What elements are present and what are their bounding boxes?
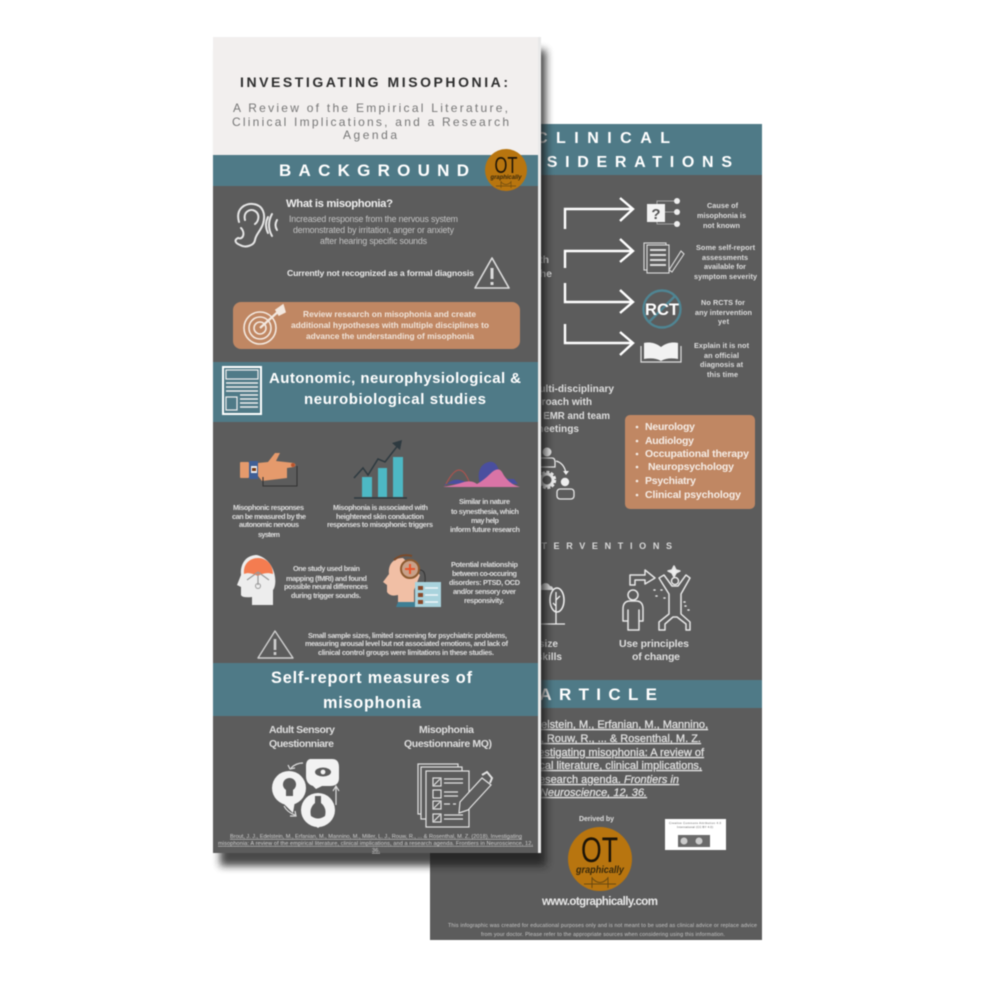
logo: OT graphically small: OT (494, 152, 518, 178)
text: assessments: symptom severity (694, 272, 758, 281)
heading: autonomic studies (213, 362, 538, 422)
subtitle: A Review of the Empirical Literature, (233, 101, 508, 115)
icon: warning triangle (475, 258, 509, 288)
logo: OT graphically small (485, 149, 527, 191)
text: assessments: assessments (702, 253, 748, 262)
panel: disciplines list: Neuropsychology (648, 461, 734, 473)
badge: creative commons license (665, 819, 726, 850)
panel: back card clinical considerations (430, 124, 762, 940)
front card shadow (220, 50, 546, 866)
heading: article: THE ARTICLE (472, 685, 657, 704)
icon: open book (641, 342, 681, 362)
icon: hand with wristband (240, 453, 297, 486)
text: no RCTs (695, 298, 752, 326)
arrow 1 (565, 198, 633, 229)
text: co-occurring disorders: and/or sensory over (453, 587, 516, 596)
chart: rising bars (354, 440, 407, 498)
text: cause: not known (703, 221, 740, 230)
text: emphasize skills: coping skills (501, 652, 562, 663)
panel: disciplines list: Audiology (645, 435, 694, 447)
callout: research aim: advance the understanding of misophonia (306, 331, 474, 341)
text: footer citation (218, 834, 533, 854)
logo: OT graphically large: OT (581, 831, 618, 870)
logo: OT graphically large: graphically (575, 865, 624, 876)
text: synesthesia: may help (471, 516, 500, 525)
text: article citation: (2018). Investigating misophonia: A review of (486, 747, 705, 759)
text: skin conduction: Misophonia is associated with (333, 503, 428, 512)
callout: research aim: additional hypotheses with multiple disciplines to (291, 320, 489, 330)
text: no RCTs: yet (718, 317, 730, 326)
text: co-occurring disorders (449, 560, 520, 605)
text: not official: Explain it is not (694, 341, 750, 350)
heading: article (430, 680, 762, 708)
text: multi-disciplinary approach: EMR and team (543, 411, 610, 422)
text: what is misophonia: What is misophonia? (286, 198, 393, 210)
text: co-occurring disorders: between co-occuring (452, 569, 517, 578)
icon: question box (647, 198, 680, 227)
text: fMRI (284, 564, 368, 600)
text: fMRI: possible neural differences (284, 582, 368, 591)
text: multi-disciplinary approach: meetings (535, 424, 579, 435)
callout: research aim: Review research on misophonia and create (303, 309, 476, 319)
text: what is misophonia: demonstrated by irritation, anger or anxiety (293, 225, 455, 235)
text: footer citation: Brout, J. J., Edelstein, M., Erfanian, M., Mannino, M., Miller, L. J., Rouw, R., ... & Rosenthal, M. Z. (2018). Investigating (230, 834, 522, 840)
text: article citation: Brout, J. J., Edelstein, M., Erfanian, M., Mannino, (469, 719, 708, 731)
partial text behind front card: the (536, 268, 552, 280)
text: not official: this time (707, 370, 738, 379)
text: multi-disciplinary approach: approach with (524, 397, 592, 408)
text: article citation: the empirical literature, clinical implications, (491, 760, 702, 772)
icon: checklist small (644, 243, 684, 273)
icon: no RCT (644, 290, 680, 328)
text: cause: misophonia is (697, 211, 746, 220)
text: limitations: measuring arousal level but not associated emotions, and lack of (305, 639, 509, 648)
text: synesthesia: inform future research (450, 525, 520, 534)
icon: question box: ? (651, 206, 661, 223)
heading: self-report measures (213, 663, 538, 716)
heading: autonomic studies: Autonomic, neurophysiological & (269, 370, 521, 387)
icon: document (223, 367, 261, 414)
subtitle: Clinical Implications, and a Research (232, 115, 509, 129)
text: not official (694, 341, 750, 379)
text: fMRI: during trigger sounds. (291, 591, 361, 600)
text: limitations: Small sample sizes, limited screening for psychiatric problems, (308, 631, 507, 640)
text: assessments (694, 243, 758, 281)
panel: disciplines list (625, 415, 755, 509)
text: no RCTs: No RCTS for (701, 298, 745, 307)
text: not official: an official (704, 351, 739, 360)
partial text behind front card (527, 254, 552, 280)
text: use principles: of change (632, 651, 680, 663)
text: cause: Cause of (707, 201, 739, 210)
icon: checklist and pencil (418, 764, 492, 827)
text: synesthesia: to synesthesia, which (451, 507, 519, 516)
title: INVESTIGATING MISOPHONIA: (240, 74, 508, 90)
text: autonomic response: system (258, 530, 280, 539)
text: footer citation: misophonia: A review of the empirical literature, clinical implications, and a research agenda. Frontiers in Neuroscience, 12, (218, 841, 533, 847)
text: misophonia questionnaire (404, 724, 492, 750)
icon: head with brain (237, 555, 275, 605)
icon: person change (623, 566, 690, 630)
heading: self-report measures: misophonia (323, 694, 422, 712)
icon: tree (536, 583, 565, 624)
subtitle: Agenda (343, 128, 397, 142)
text: synesthesia (450, 497, 520, 534)
text: autonomic response: Misophonic responses (233, 503, 304, 512)
text: cause (697, 201, 746, 230)
heading: interventions: INTERVENTIONS (519, 541, 672, 551)
logo: OT graphically large (568, 827, 632, 891)
panel: front card investigating misophonia (213, 37, 541, 854)
text: skin conduction: heightened skin conduction (336, 512, 424, 521)
text: synesthesia: Similar in nature (459, 497, 510, 506)
text: disclaimer (448, 923, 757, 938)
logo: OT graphically small: graphically (490, 174, 522, 181)
heading: clinical considerations: CONSIDERATIONS (488, 154, 732, 171)
panel: disciplines list: Neurology (645, 421, 695, 433)
heading: self-report measures: Self-report measures of (271, 669, 473, 687)
heading: autonomic studies: neurobiological studies (304, 391, 486, 408)
icon: ear (236, 204, 277, 246)
text: autonomic response: can be measured by the (232, 512, 306, 521)
text: what is misophonia: Increased response from the nervous system (289, 214, 458, 224)
icon: speech bubbles (272, 759, 339, 828)
subtitle (232, 101, 509, 142)
icon: team network (538, 448, 574, 499)
text: assessments: Some self-report (696, 243, 756, 252)
panel: disciplines list: Psychiatry (645, 475, 696, 487)
text: use principles (619, 638, 689, 663)
text: not a formal diagnosis: Currently not recognized as a formal diagnosis (287, 268, 474, 278)
text: autonomic response: autonomic nervous (239, 520, 299, 529)
text: adult sensory questionnaire: Adult Sensory (269, 724, 335, 736)
text: what is misophonia: after hearing specific sounds (320, 236, 428, 246)
text: adult sensory questionnaire (269, 724, 335, 750)
partial text behind front card: with (527, 254, 549, 266)
heading: clinical considerations: CLINICAL (536, 130, 670, 147)
text: emphasize skills (501, 639, 562, 663)
text: multi-disciplinary approach (524, 384, 614, 435)
text: autonomic response (232, 503, 306, 539)
icon: target (244, 305, 285, 344)
text: use principles: Use principles (619, 638, 689, 650)
text: fMRI: One study used brain (293, 564, 360, 573)
text: footer citation: 36. (372, 848, 380, 854)
text: co-occurring disorders: disorders: PTSD, OCD (449, 578, 520, 587)
heading: clinical considerations (430, 124, 762, 175)
panel: disciplines list: Occupational therapy (645, 448, 749, 460)
text: misophonia questionnaire: Questionnaire MQ) (404, 738, 492, 750)
badge: creative commons license: International (CC BY 4.0) (677, 825, 713, 829)
icon: head with clinical record (383, 555, 441, 607)
text: limitations (305, 631, 509, 657)
text: article citation: Neuroscience, 12, 36. (540, 787, 647, 799)
text: disclaimer: This infographic was created for educational purposes only and is not meant to be used as clinical advice or replace advice (448, 923, 757, 929)
text: limitations: clinical control groups were limitations in these studies. (318, 648, 494, 657)
heading: background: BACKGROUND (279, 161, 469, 180)
chart: distribution curves (443, 462, 520, 487)
callout: research aim (233, 302, 520, 349)
arrow 2 (565, 239, 633, 268)
icon: warning triangle limitations (258, 631, 293, 658)
text: article citation: M., Miller, L. J., Rouw, R., ... & Rosenthal, M. Z. (470, 733, 701, 745)
text: article citation (469, 719, 708, 799)
text: multi-disciplinary approach: Multi-disciplinary (531, 384, 614, 395)
arrow 3 (565, 283, 633, 313)
text: assessments: available for (704, 262, 746, 271)
text: not official: diagnosis at (700, 360, 744, 369)
text: what is misophonia (286, 198, 458, 246)
text: skin conduction (327, 503, 433, 529)
text: emphasize skills: Emphasize (505, 639, 558, 650)
text: website: www.otgraphically.com (541, 896, 658, 908)
text: article citation: and a research agenda. Frontiers in (505, 774, 679, 786)
panel: disciplines list: Clinical psychology (645, 489, 741, 501)
text: misophonia questionnaire: Misophonia (419, 724, 474, 736)
badge: creative commons license: Creative Commons Attribution 4.0 (669, 821, 721, 825)
heading: background (213, 155, 538, 186)
text: fMRI: mapping (fMRI) and found (286, 574, 367, 583)
text: no RCTs: any intervention (695, 308, 752, 317)
text: co-occurring disorders: Potential relationship (451, 560, 519, 569)
text: co-occurring disorders: responsivity. (464, 596, 504, 605)
icon: no RCT: RCT (645, 301, 679, 319)
text: derived by: Derived by (579, 816, 614, 823)
arrow 4 (565, 324, 633, 355)
text: adult sensory questionnaire: Questionniare (269, 738, 334, 750)
text: disclaimer: from your doctor. Please refer to the appropriate sources when considering using this information. (481, 932, 725, 938)
text: skin conduction: responses to misophonic triggers (327, 520, 433, 529)
